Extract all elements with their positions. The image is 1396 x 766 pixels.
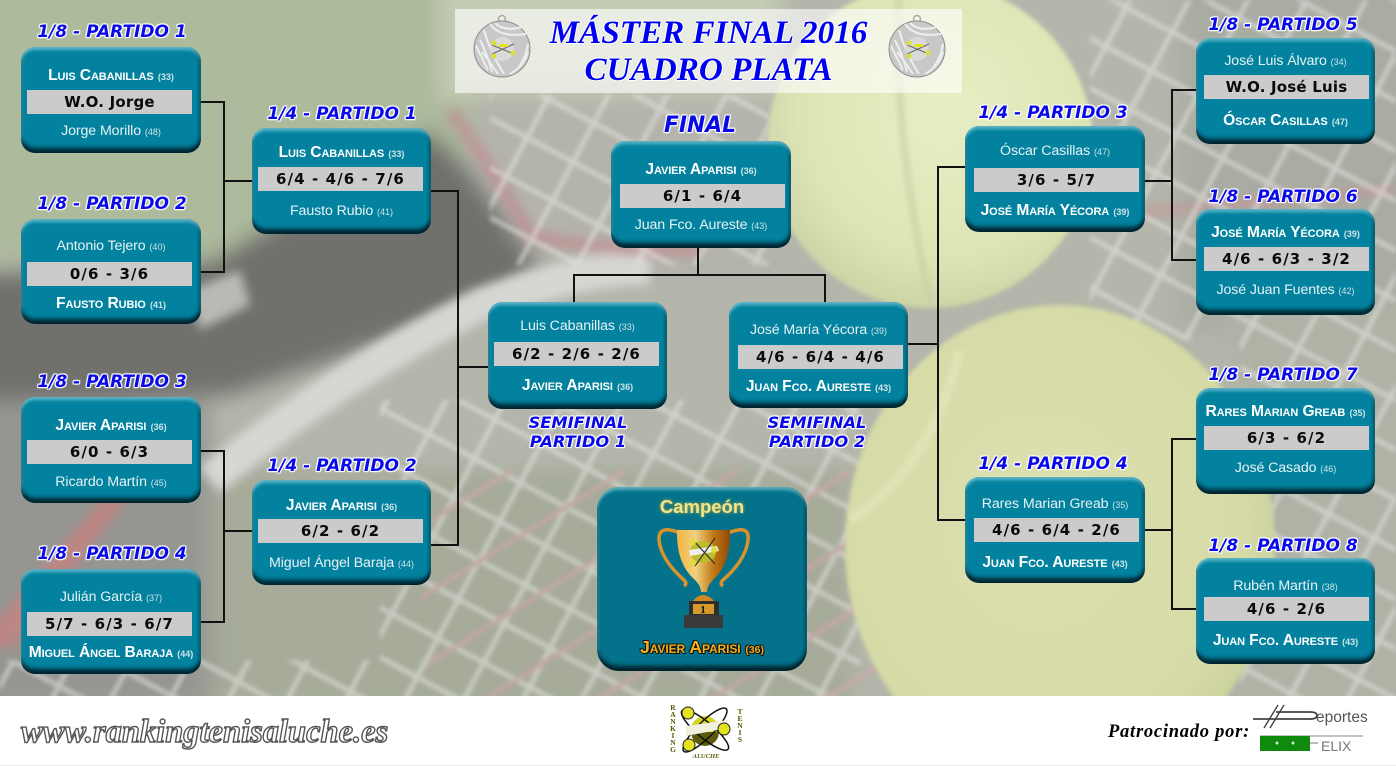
icon: ranking tenis aluche logo: S [738, 735, 742, 744]
match: 1/8 partido 4 [21, 569, 201, 674]
match: semifinal 2: José María Yécora (39) [750, 322, 887, 338]
match: 1/8 partido 8: 4/6 - 2/6 [1247, 600, 1326, 618]
match: 1/8 partido 1: Jorge Morillo (48) [61, 123, 161, 139]
heading: 1/4 partido 2: 1/4 - PARTIDO 2 [267, 456, 417, 476]
match: 1/4 partido 2: Miguel Ángel Baraja (44) [269, 555, 414, 571]
match: 1/4 partido 2 [252, 480, 431, 585]
match: 1/4 partido 4: Rares Marian Greab (35) [982, 496, 1128, 512]
heading: 1/8 partido 3: 1/8 - PARTIDO 3 [37, 372, 187, 392]
match: 1/4 partido 1 [252, 128, 431, 234]
match: 1/8 partido 5: W.O. José Luis [1226, 78, 1347, 96]
website url: www.rankingtenisaluche.es [21, 714, 388, 750]
match: 1/4 partido 3: Óscar Casillas (47) [1000, 143, 1110, 159]
match: 1/8 partido 6: José María Yécora (39) [1211, 224, 1360, 241]
heading: 1/4 partido 3: 1/4 - PARTIDO 3 [978, 103, 1128, 123]
sponsor text: Patrocinado por: [1108, 722, 1250, 742]
match: semifinal 1: 6/2 - 2/6 - 2/6 [512, 345, 641, 363]
match: 1/4 partido 1: Fausto Rubio (41) [290, 203, 393, 219]
title text: CUADRO PLATA [584, 50, 833, 88]
heading: semifinal partido 1 [528, 413, 628, 451]
match: 1/8 partido 8 [1196, 558, 1375, 664]
match: 1/8 partido 4: Julián García (37) [60, 589, 162, 605]
heading: semifinal partido 2 [766, 413, 866, 451]
icon: silver medal left [474, 14, 530, 78]
icon: ranking tenis aluche logo: N [670, 738, 676, 747]
match: 1/8 partido 5: José Luis Álvaro (34) [1224, 53, 1347, 69]
icon: ranking tenis aluche logo: N [737, 721, 743, 730]
match: 1/4 partido 4: 4/6 - 6/4 - 2/6 [992, 521, 1121, 539]
icon: sponsor logo deportes felix: eportes [1316, 709, 1368, 726]
match: final: Javier Aparisi (36) [645, 161, 757, 178]
icon: gold trophy: 1 [700, 604, 706, 616]
match: 1/4 partido 1: 6/4 - 4/6 - 7/6 [276, 170, 405, 188]
match: final: 6/1 - 6/4 [663, 187, 742, 205]
match: 1/8 partido 6: José Juan Fuentes (42) [1216, 282, 1355, 298]
match: 1/8 partido 3: Ricardo Martín (45) [55, 474, 167, 490]
heading: semifinal partido 1: PARTIDO 1 [530, 432, 626, 451]
match: 1/4 partido 4 [965, 477, 1145, 583]
heading: 1/8 partido 1: 1/8 - PARTIDO 1 [37, 22, 187, 42]
icon: ranking tenis aluche logo: R [670, 703, 676, 712]
match: semifinal 2: 4/6 - 6/4 - 4/6 [756, 348, 885, 366]
heading: semifinal partido 2: SEMIFINAL [768, 413, 866, 432]
match: 1/8 partido 7 [1196, 388, 1375, 494]
match: 1/8 partido 6: 4/6 - 6/3 - 3/2 [1222, 250, 1351, 268]
match: semifinal 1: Javier Aparisi (36) [522, 377, 633, 394]
match: 1/8 partido 1: Luis Cabanillas (33) [48, 67, 174, 84]
match: final: Juan Fco. Aureste (43) [635, 217, 767, 233]
match: semifinal 2 [729, 302, 908, 408]
icon: ranking tenis aluche logo: G [670, 745, 676, 754]
match: semifinal 2: Juan Fco. Aureste (43) [746, 378, 891, 395]
icon: sponsor logo deportes felix [1253, 704, 1368, 754]
match: 1/4 partido 2: 6/2 - 6/2 [301, 522, 380, 540]
heading: 1/4 partido 1: 1/4 - PARTIDO 1 [267, 104, 417, 124]
match: 1/8 partido 7: Rares Marian Greab (35) [1205, 403, 1366, 420]
icon: ranking tenis aluche logo: ALUCHE [692, 753, 720, 760]
match: 1/8 partido 7: 6/3 - 6/2 [1247, 429, 1326, 447]
heading: semifinal partido 1: SEMIFINAL [529, 413, 627, 432]
match: semifinal 1: Luis Cabanillas (33) [520, 318, 635, 334]
heading: 1/4 partido 4: 1/4 - PARTIDO 4 [978, 454, 1128, 474]
heading: 1/8 partido 6: 1/8 - PARTIDO 6 [1208, 187, 1358, 207]
match: 1/8 partido 7: José Casado (46) [1235, 460, 1336, 476]
icon: silver medal right [888, 14, 946, 78]
icon: ranking tenis aluche logo: T [737, 707, 743, 716]
icon: ranking tenis aluche logo: A [670, 710, 676, 719]
title banner [455, 9, 962, 93]
match: 1/8 partido 2 [21, 219, 201, 324]
match: 1/8 partido 3: 6/0 - 6/3 [70, 443, 149, 461]
match: 1/8 partido 4: Miguel Ángel Baraja (44) [29, 644, 193, 661]
heading: 1/8 partido 2: 1/8 - PARTIDO 2 [37, 194, 187, 214]
match: 1/8 partido 2: Antonio Tejero (40) [57, 238, 165, 254]
match: 1/8 partido 1: W.O. Jorge [64, 93, 155, 111]
icon: ranking tenis aluche logo [670, 703, 743, 760]
icon: gold trophy [657, 528, 750, 628]
match: 1/8 partido 2: 0/6 - 3/6 [70, 265, 149, 283]
title text [548, 14, 868, 88]
footer band [0, 696, 1396, 766]
icon: ranking tenis aluche logo: I [672, 731, 675, 740]
match: 1/4 partido 4: Juan Fco. Aureste (43) [982, 554, 1128, 571]
match: semifinal 1 [488, 302, 667, 409]
match: 1/4 partido 1: Luis Cabanillas (33) [279, 144, 404, 161]
match: 1/8 partido 6 [1196, 209, 1375, 315]
match: 1/4 partido 3: José María Yécora (39) [981, 202, 1129, 219]
heading: 1/8 partido 5: 1/8 - PARTIDO 5 [1208, 15, 1358, 35]
match: 1/8 partido 3 [21, 397, 201, 503]
heading: 1/8 partido 8: 1/8 - PARTIDO 8 [1208, 536, 1358, 556]
match: 1/4 partido 3 [965, 126, 1145, 232]
match: 1/4 partido 3: 3/6 - 5/7 [1017, 171, 1096, 189]
match: final [611, 141, 791, 248]
icon: ranking tenis aluche logo: K [670, 724, 676, 733]
heading: 1/8 partido 4: 1/8 - PARTIDO 4 [37, 544, 187, 564]
heading: 1/8 partido 7: 1/8 - PARTIDO 7 [1208, 365, 1358, 385]
icon: ranking tenis aluche logo: I [739, 728, 742, 737]
icon: ranking tenis aluche logo: E [737, 714, 743, 723]
icon: sponsor logo deportes felix: ELIX [1321, 738, 1352, 754]
match: 1/8 partido 3: Javier Aparisi (36) [55, 417, 167, 434]
match: 1/8 partido 8: Rubén Martín (38) [1233, 578, 1338, 594]
heading: final: FINAL [664, 113, 736, 138]
match: 1/8 partido 5 [1196, 38, 1375, 144]
match: 1/4 partido 2: Javier Aparisi (36) [286, 497, 397, 514]
match: 1/8 partido 8: Juan Fco. Aureste (43) [1213, 632, 1358, 649]
match: 1/8 partido 5: Óscar Casillas (47) [1223, 112, 1348, 129]
heading: semifinal partido 2: PARTIDO 2 [769, 432, 865, 451]
match: 1/8 partido 2: Fausto Rubio (41) [56, 295, 166, 312]
match: 1/8 partido 1 [21, 47, 201, 153]
title text: MÁSTER FINAL 2016 [550, 14, 867, 51]
champion name: Javier Aparisi (36) [640, 637, 764, 657]
icon: ranking tenis aluche logo: N [670, 717, 676, 726]
champion heading: Campeón [660, 496, 744, 517]
panel: champion [597, 487, 807, 671]
match: 1/8 partido 4: 5/7 - 6/3 - 6/7 [45, 615, 174, 633]
